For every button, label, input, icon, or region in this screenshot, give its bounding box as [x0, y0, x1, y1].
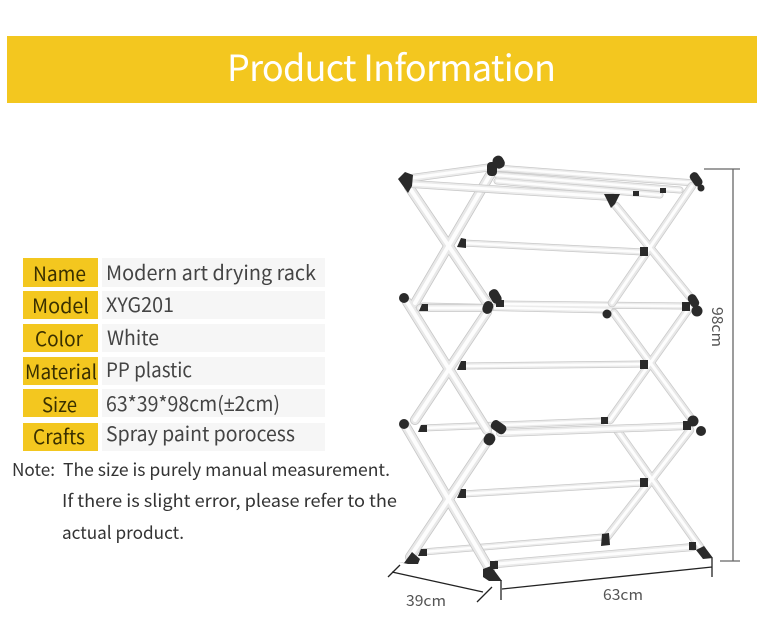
note text: If there is slight error, please refer to the: [62, 488, 397, 513]
right side frame: [607, 186, 702, 550]
row: model: [23, 289, 325, 319]
back horizontal rails: [423, 168, 695, 552]
specification table: [23, 257, 325, 451]
row: crafts: [23, 418, 325, 451]
row: color: [23, 322, 325, 352]
row: name: [23, 257, 325, 287]
row: color: White: [107, 322, 159, 351]
drying rack illustration: [398, 154, 713, 581]
dimension: depth 39cm: 39cm: [406, 590, 446, 611]
row: crafts: Crafts: [33, 421, 85, 450]
front rails: [412, 167, 693, 564]
row: size: 63*39*98cm(±2cm): [106, 388, 280, 417]
title: Product Information: [227, 40, 556, 92]
row: name: Name: [33, 258, 86, 287]
row: size: [23, 388, 325, 418]
row: model: Model: [32, 290, 89, 319]
row: material: PP plastic: [106, 354, 192, 383]
note text: The size is purely manual measurement.: [63, 457, 390, 482]
dimension: width 63cm: 63cm: [603, 584, 643, 605]
note text: [12, 457, 397, 545]
dimension: height 98cm: 98cm: [707, 307, 728, 347]
row: size: Size: [42, 389, 77, 418]
row: crafts: Spray paint porocess: [106, 418, 295, 447]
black connector joints: [398, 154, 713, 581]
dimension: height 98cm: [704, 169, 740, 561]
title banner: [7, 36, 757, 103]
note text: actual product.: [62, 520, 184, 545]
row: name: Modern art drying rack: [106, 257, 316, 286]
left side frame: [405, 175, 490, 570]
dimension: depth 39cm: [388, 565, 492, 611]
dimension: width 63cm: [501, 558, 712, 605]
row: color: Color: [35, 323, 83, 352]
row: material: [23, 354, 325, 385]
note text: Note:: [12, 457, 55, 482]
row: material: Material: [25, 356, 97, 385]
row: model: XYG201: [106, 289, 174, 318]
